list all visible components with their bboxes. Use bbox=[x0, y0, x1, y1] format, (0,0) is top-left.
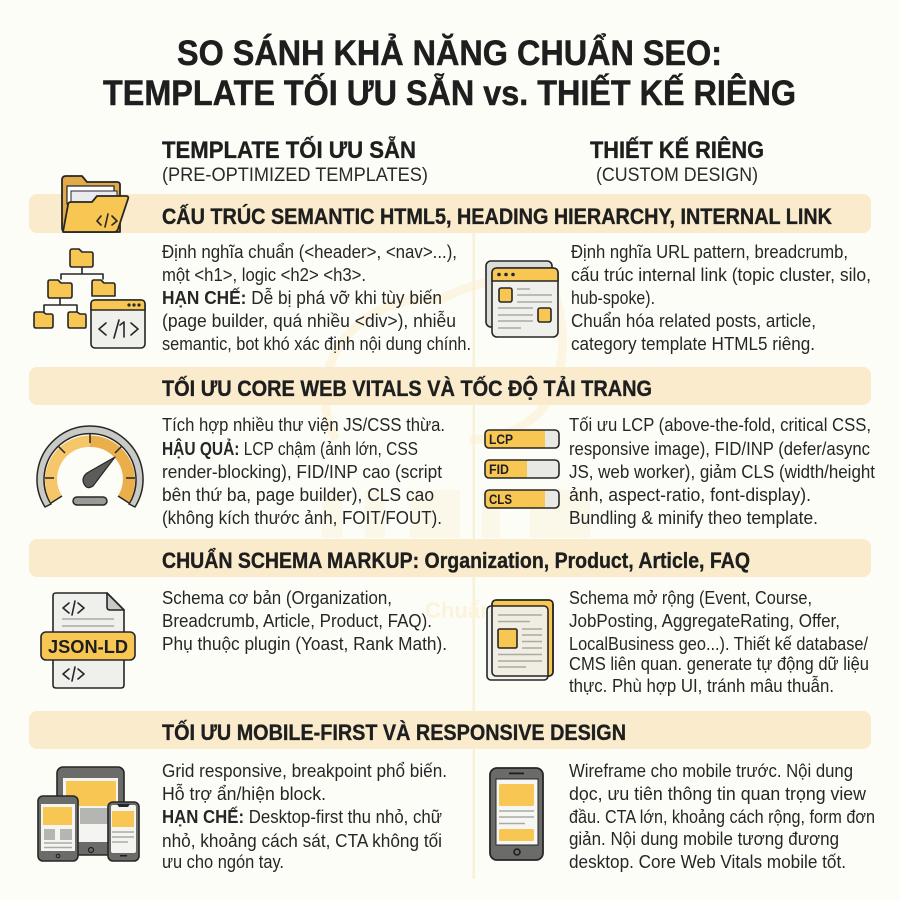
title bbox=[103, 33, 796, 113]
text: row 4 template: Grid responsive, breakpoint phổ biến. bbox=[162, 761, 447, 781]
column heading: template: TEMPLATE TỐI ƯU SẴN bbox=[162, 136, 416, 164]
text: row 4 custom: Wireframe cho mobile trước. Nội dung bbox=[569, 761, 853, 781]
section band 3: CHUẨN SCHEMA MARKUP: Organization, Product, Article, FAQ bbox=[162, 548, 750, 573]
title: TEMPLATE TỐI ƯU SẴN vs. THIẾT KẾ RIÊNG bbox=[103, 73, 796, 113]
text: row 3 custom: thực. Phù hợp UI, tránh mâu thuẫn. bbox=[569, 675, 834, 696]
section band 2: TỐI ƯU CORE WEB VITALS VÀ TỐC ĐỘ TẢI TRANG bbox=[162, 375, 652, 401]
text: row 2 custom: Bundling & minify theo template. bbox=[569, 508, 818, 528]
title: SO SÁNH KHẢ NĂNG CHUẨN SEO: bbox=[177, 33, 722, 73]
text: row 2 template: render-blocking), FID/INP cao (script bbox=[162, 462, 442, 482]
text: row 2 template bbox=[162, 415, 445, 528]
text: Chuẩn bbox=[425, 598, 493, 623]
icon: JSON-LD document bbox=[41, 593, 135, 688]
text: row 3 custom: JobPosting, AggregateRating, Offer, bbox=[569, 611, 840, 631]
text: row 1 custom: Định nghĩa URL pattern, breadcrumb, bbox=[571, 242, 848, 262]
text: row 4 custom: đầu. CTA lớn, khoảng cách rộng, form đơn bbox=[569, 807, 875, 827]
text: row 3 template: Phụ thuộc plugin (Yoast, Rank Math). bbox=[162, 634, 447, 654]
text: row 4 template: Hỗ trợ ẩn/hiện block. bbox=[162, 783, 326, 804]
text: row 4 template: nhỏ, khoảng cách sát, CTA không tối bbox=[162, 831, 442, 851]
text: row 2 custom bbox=[569, 415, 875, 528]
icon: mobile phone wireframe bbox=[490, 768, 543, 860]
text: row 1 template: (page builder, quá nhiều <div>), nhiễu bbox=[162, 310, 456, 331]
text: row 4 template: ưu cho ngón tay. bbox=[162, 852, 284, 872]
text: row 2 template: (không kích thước ảnh, FOIT/FOUT). bbox=[162, 508, 442, 528]
column heading: custom design bbox=[590, 136, 764, 186]
icon: LCP FID CLS meters: FID bbox=[489, 462, 509, 477]
icon: folder tree with code window bbox=[34, 249, 145, 348]
text: row 1 custom: cấu trúc internal link (topic cluster, silo, bbox=[571, 265, 871, 285]
text: row 4 custom: dọc, ưu tiên thông tin quan trọng view bbox=[569, 784, 867, 804]
section band 4 bbox=[29, 711, 871, 749]
text: row 1 template bbox=[162, 242, 471, 354]
section band 1 bbox=[29, 194, 871, 233]
icon: LCP FID CLS meters bbox=[485, 430, 559, 508]
text: row 4 custom bbox=[569, 761, 875, 872]
column heading: template: (PRE-OPTIMIZED TEMPLATES) bbox=[162, 165, 428, 186]
section band 2 bbox=[29, 367, 871, 405]
text: row 4 custom: desktop. Core Web Vitals mobile tốt. bbox=[569, 852, 846, 872]
text: row 2 custom: ảnh, aspect-ratio, font-display). bbox=[569, 485, 811, 505]
icon: responsive devices bbox=[38, 767, 139, 861]
text: row 3 template: Schema cơ bản (Organization, bbox=[162, 588, 392, 608]
text: row 3 custom: LocalBusiness geo...). Thiết kế database/ bbox=[569, 634, 868, 654]
text: row 2 custom: Tối ưu LCP (above-the-fold, critical CSS, bbox=[569, 415, 871, 435]
icon: JSON-LD document: JSON-LD bbox=[48, 637, 128, 657]
text: row 1 template: HẠN CHẾ: Dễ bị phá vỡ khi tùy biến bbox=[162, 287, 442, 308]
icon: LCP FID CLS meters: LCP bbox=[489, 432, 513, 447]
icon: LCP FID CLS meters: CLS bbox=[489, 492, 512, 507]
icon: article pages bbox=[487, 600, 553, 680]
text: row 1 custom: Chuẩn hóa related posts, article, bbox=[571, 311, 816, 331]
column heading: template bbox=[162, 136, 428, 186]
text: row 3 template: Breadcrumb, Article, Product, FAQ). bbox=[162, 611, 432, 631]
text: row 1 custom: category template HTML5 riêng. bbox=[571, 334, 815, 354]
text: row 3 custom bbox=[569, 588, 869, 696]
section band 3 bbox=[29, 539, 871, 577]
text: row 1 template: semantic, bot khó xác định nội dung chính. bbox=[162, 334, 471, 354]
column heading: custom design: (CUSTOM DESIGN) bbox=[596, 165, 758, 186]
text: row 3 custom: CMS liên quan. generate tự động dữ liệu bbox=[569, 654, 869, 674]
text: row 2 template: HẬU QUẢ: LCP chậm (ảnh lớn, CSS bbox=[162, 438, 418, 459]
text: row 2 template: bên thứ ba, page builder), CLS cao bbox=[162, 485, 434, 505]
column heading: custom design: THIẾT KẾ RIÊNG bbox=[590, 136, 764, 164]
text: row 3 custom: Schema mở rộng (Event, Course, bbox=[569, 588, 812, 608]
icon: browser windows bbox=[486, 261, 558, 337]
text: row 1 custom: hub-spoke). bbox=[571, 288, 655, 308]
text: row 4 custom: giản. Nội dung mobile tương đương bbox=[569, 829, 839, 849]
text: row 2 custom: responsive image), FID/INP (defer/async bbox=[569, 439, 870, 459]
text: row 1 custom bbox=[571, 242, 871, 354]
text: row 4 template: HẠN CHẾ: Desktop-first thu nhỏ, chữ bbox=[162, 806, 442, 827]
text: row 2 template: Tích hợp nhiều thư viện JS/CSS thừa. bbox=[162, 415, 445, 435]
icon: folder bbox=[62, 176, 128, 232]
text: row 2 custom: JS, web worker), giảm CLS (width/height bbox=[569, 462, 875, 482]
section band 4: TỐI ƯU MOBILE-FIRST VÀ RESPONSIVE DESIGN bbox=[162, 719, 626, 745]
icon: speed gauge bbox=[37, 426, 143, 507]
text: row 3 template bbox=[162, 588, 447, 654]
text: row 1 template: một <h1>, logic <h2> <h3>. bbox=[162, 265, 366, 285]
text: row 4 template bbox=[162, 761, 447, 872]
text: row 1 template: Định nghĩa chuẩn (<header>, <nav>...), bbox=[162, 242, 457, 262]
